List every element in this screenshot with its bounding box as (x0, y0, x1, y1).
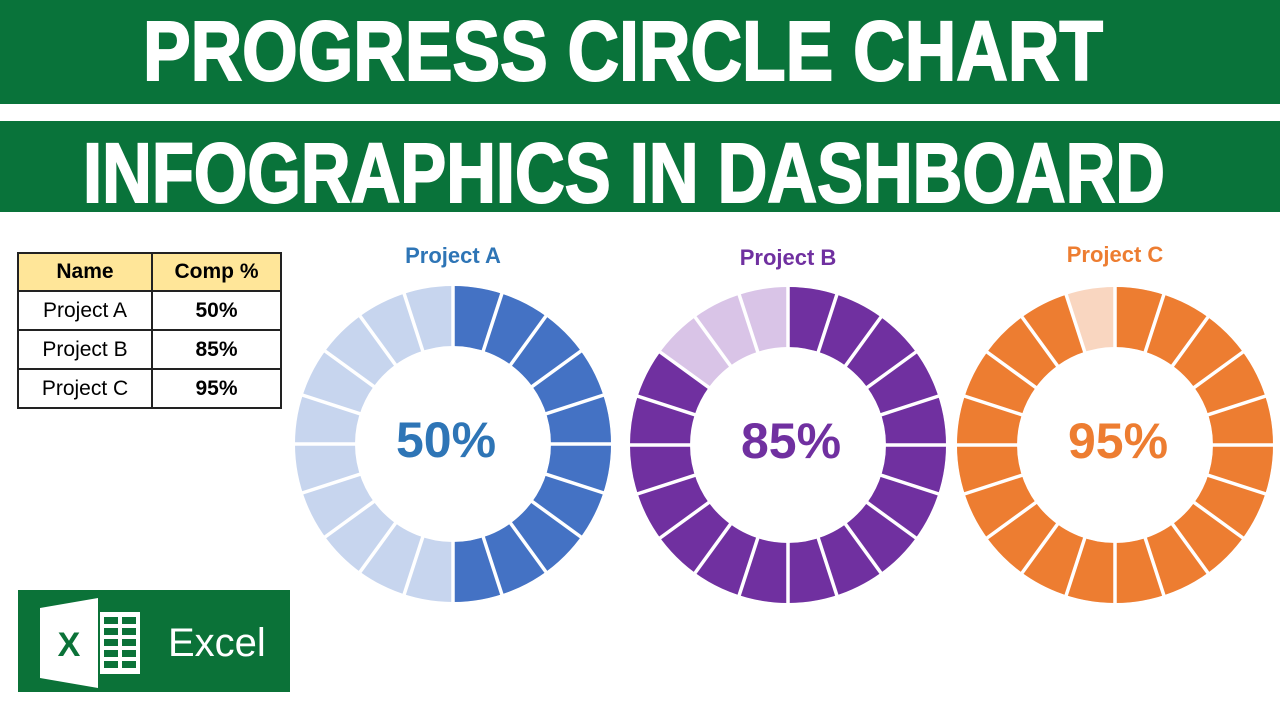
icon: Excel logo (18, 590, 290, 692)
panel: Project A donut (288, 243, 618, 609)
data table: 95% (195, 376, 238, 400)
data table: 50% (195, 298, 238, 322)
icon: Excel logo: X (58, 626, 81, 664)
panel: Project B donut (623, 245, 953, 610)
data table: Name (56, 260, 114, 283)
data table: 85% (195, 338, 238, 360)
icon: Excel logo: Excel (168, 621, 266, 665)
data table: Project C (42, 376, 128, 400)
banner: title line 1: PROGRESS CIRCLE CHART (143, 4, 1103, 98)
panel: Project A donut: Project A (405, 243, 501, 268)
panel: Project C donut: 95% (1068, 413, 1168, 469)
panel: Project C donut: Project C (1067, 242, 1163, 267)
data table: Comp % (174, 260, 258, 283)
panel: Project A donut: 50% (396, 412, 496, 468)
panel: Project B donut: 85% (741, 413, 841, 469)
panel: Project B donut: Project B (740, 245, 836, 270)
panel: Project C donut (950, 242, 1280, 610)
data table: Project A (43, 298, 127, 322)
data table (17, 252, 282, 409)
data table: Project B (42, 338, 128, 360)
